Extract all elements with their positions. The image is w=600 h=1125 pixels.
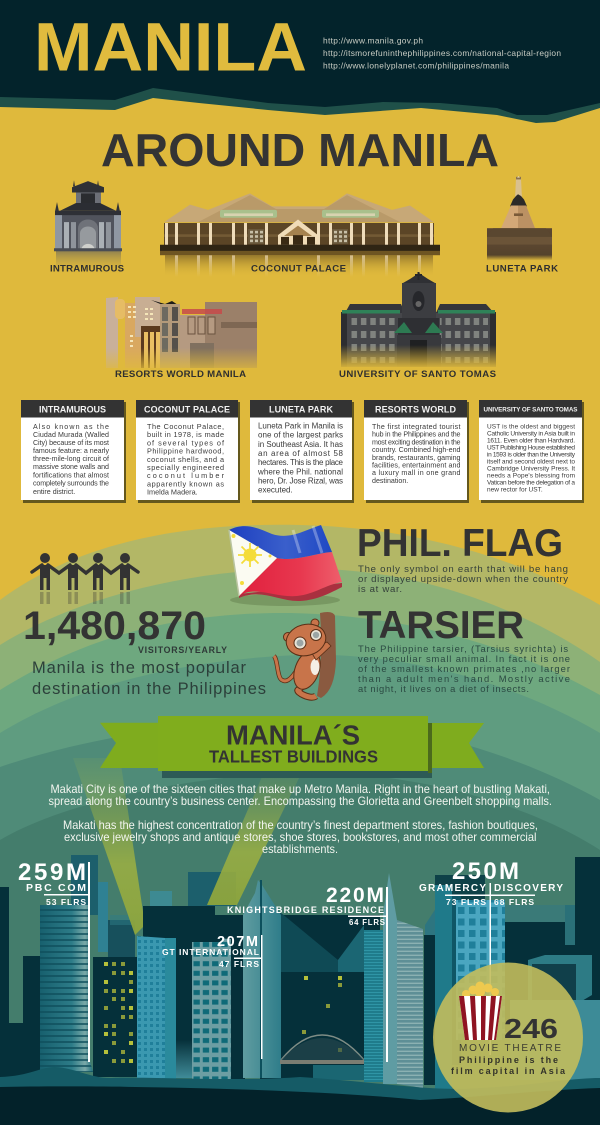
skyline backdrop and buildings: [0, 758, 600, 1125]
callout: movie theatre circle: [433, 962, 583, 1112]
card text: executed.: [258, 486, 293, 494]
tower: Gramercy and Discovery: [435, 885, 505, 1090]
landmark: resorts world manila: [106, 297, 257, 374]
tower: striped twin: [364, 873, 423, 1088]
card text: in Southeast Asia. It has: [258, 440, 343, 449]
destination statement: Manila is the most popular: [32, 659, 246, 677]
card: coconut palace: [136, 400, 240, 503]
destination statement: destination in the Philippines: [32, 680, 266, 698]
banner subheading: TALLEST BUILDINGS: [209, 746, 378, 766]
destination statement: [32, 659, 266, 698]
card text: 1611. Even older than Hardvard.: [487, 438, 575, 444]
card text: a luxury mall in one grand: [372, 469, 461, 477]
stat: Gramercy and Discovery 250M: 250M: [452, 858, 519, 885]
card text: Catholic University in Asia built in: [487, 430, 575, 438]
background towers: [71, 855, 575, 965]
card text: The Coconut Palace,: [147, 422, 224, 431]
card text: Vatican before the delegation of a: [487, 480, 575, 486]
source links: http://itsmorefuninthephilippines.com/national-capital-region: [323, 48, 561, 58]
intro text: establishments.: [262, 842, 338, 856]
heading: phil flag: PHIL. FLAG: [357, 522, 563, 565]
card: coconut palace: COCONUT PALACE: [144, 404, 230, 414]
card text: The first integrated tourist: [372, 423, 461, 431]
cinema note: film capital in Asia: [451, 1066, 566, 1076]
card text: [147, 422, 225, 497]
card: resorts world: [364, 400, 469, 503]
card text: built in 1978, is made: [147, 430, 224, 439]
flag description: or displayed upside-down when the country: [358, 574, 568, 585]
card text: entire district.: [33, 488, 75, 496]
card header: [479, 400, 582, 418]
card text: Luneta Park in Manila is: [258, 422, 343, 430]
card text: hub in the Philippines and the: [372, 431, 461, 439]
card text: [33, 423, 109, 496]
tarsier description: than a adult men's hand. Mostly active: [358, 673, 570, 684]
card text: itself and second oldest next to: [487, 458, 575, 466]
card header: [250, 400, 352, 418]
heading: tarsier: TARSIER: [358, 604, 524, 647]
card text: hero, Dr. Jose Rizal, was: [258, 476, 343, 485]
card text: an area of almost 58: [258, 449, 344, 458]
tower: PBC Com: [40, 905, 93, 1072]
card: university of santo tomas: UNIVERSITY OF SANTO TOMAS: [484, 406, 578, 414]
card text: [372, 423, 461, 485]
stat: PBC Com 259M: 53 FLRS: [46, 897, 86, 907]
stat: GT International 207M: GT INTERNATIONAL: [162, 947, 259, 957]
ground: [0, 1067, 600, 1125]
heading: around manila: AROUND MANILA: [101, 124, 499, 176]
intro text: [48, 782, 552, 856]
dark silhouettes: [0, 857, 600, 1085]
intro text: Makati City is one of the sixteen cities that make up Metro Manila. Right in the heart of bustling Makati,: [50, 782, 550, 796]
flag sun: [238, 543, 262, 567]
stat: Gramercy and Discovery 250M: [419, 858, 563, 1055]
flag description: [358, 564, 568, 595]
card text: facilities, entertainment and: [372, 462, 461, 470]
card text: destination.: [372, 477, 408, 485]
cinema note: [451, 1055, 566, 1076]
card: intramurous: [21, 400, 126, 503]
card text: brands, restaurants, gaming: [372, 454, 461, 462]
card text: new rector for UST.: [487, 486, 543, 494]
card text: needs a Pope's blessing from: [487, 472, 575, 480]
lit windows: [104, 962, 342, 1063]
intro text: exclusive jewelry shops and antique stores, shoe stores, bookstores, and most other commercial: [64, 830, 536, 844]
landmark: coconut palace: [160, 193, 440, 277]
stat: Gramercy and Discovery 250M: 68 FLRS: [494, 897, 534, 907]
card text: Also known as the: [33, 423, 109, 431]
card text: Imelda Madera.: [147, 488, 198, 497]
cinema note: Philippine is the: [459, 1055, 558, 1065]
tower: light grid building: [137, 936, 192, 1079]
stat: PBC Com 259M: PBC COM: [26, 882, 86, 894]
searchlight beams: [73, 758, 302, 935]
card text: of several types of: [147, 438, 225, 447]
card text: coconut shells, and a: [147, 455, 225, 464]
card text: [487, 424, 576, 494]
intro text: Makati has the highest concentration of the country’s finest department stores, fashion boutiques,: [63, 818, 538, 832]
visitors caption: VISITORS/YEARLY: [138, 645, 227, 655]
tower: GT International: [192, 936, 231, 1080]
source links: http://www.lonelyplanet.com/philippines/manila: [323, 60, 509, 70]
stat: Gramercy and Discovery 250M: DISCOVERY: [494, 883, 563, 894]
card text: UST Publishing House established: [487, 444, 575, 452]
card text: one of the largest parks: [258, 431, 343, 440]
tower: Knightsbridge: [243, 880, 281, 1078]
stat: GT International 207M: 207M: [217, 934, 258, 950]
arch bridge: [280, 1035, 364, 1080]
label: coconut palace: COCONUT PALACE: [251, 264, 347, 274]
icon: tarsier on tree: [274, 612, 336, 698]
background curved colour bands: [0, 525, 600, 1125]
tarsier description: at night, it lives on a diet of insects.: [358, 683, 529, 694]
flag description: is at war.: [358, 584, 402, 595]
main title: MANILA: [34, 9, 307, 86]
source links: http://www.manila.gov.ph: [323, 36, 423, 46]
banner heading: MANILA´S: [226, 719, 360, 750]
header band: [0, 0, 600, 123]
card text: hectares. This is the place: [258, 458, 344, 467]
landmark: luneta park: [487, 176, 552, 260]
landmark: university of santo tomas: [341, 272, 496, 369]
card text: where the Phil. national: [257, 467, 343, 476]
stat: Knightsbridge Residence 220M: [227, 884, 388, 1062]
stat: PBC Com 259M: [18, 859, 90, 1062]
stat: Knightsbridge Residence 220M: KNIGHTSBRIDGE RESIDENCE: [227, 905, 384, 915]
card text: massive stone walls and: [33, 463, 109, 471]
card text: [257, 422, 344, 494]
intro text: spread along the country’s business center. Encompassing the Glorietta and Greenbelt shopping malls.: [48, 794, 552, 808]
card text: Ciudad Murada (Walled: [33, 431, 109, 439]
card text: famous feature: a nearly: [33, 447, 109, 455]
card text: specially engineered: [147, 463, 224, 472]
icon: people holding hands: [32, 553, 138, 604]
card: luneta park: LUNETA PARK: [269, 404, 334, 414]
card text: fortifications that almost: [33, 472, 109, 480]
icon: philippine flag: [229, 525, 342, 606]
tarsier description: [358, 643, 570, 694]
card text: Cambridge University Press. It: [487, 466, 575, 472]
stat: Knightsbridge Residence 220M: 64 FLRS: [349, 918, 385, 927]
tarsier description: of the smallest known primates ,no larger: [358, 663, 570, 674]
cinema label: MOVIE THEATRE: [459, 1043, 561, 1054]
card text: three-mile-long circuit of: [33, 455, 109, 463]
visitors figure: 1,480,870: [23, 604, 206, 648]
card: university of santo tomas: [479, 400, 584, 503]
card header: [136, 400, 238, 418]
card text: City) because of its most: [33, 439, 109, 447]
building behind circle: [510, 955, 600, 1080]
stat: Knightsbridge Residence 220M: 220M: [326, 884, 384, 907]
card text: completely surrounds the: [33, 480, 109, 488]
card: luneta park: [250, 400, 354, 503]
stat: GT International 207M: [162, 934, 262, 1059]
stat: Gramercy and Discovery 250M: 73 FLRS: [446, 897, 486, 907]
cinema count: 246: [504, 1013, 558, 1044]
tarsier description: The Philippine tarsier, (Tarsius syrichta) is: [358, 643, 568, 654]
card header: [21, 400, 124, 418]
stat: GT International 207M: 47 FLRS: [219, 959, 259, 969]
label: luneta park: LUNETA PARK: [486, 264, 558, 274]
label: university of santo tomas: UNIVERSITY OF SANTO TOMAS: [339, 369, 497, 380]
icon: popcorn: [459, 982, 502, 1040]
card text: country. Combined high-end: [372, 446, 461, 454]
card text: apparently known as: [147, 479, 224, 488]
landmark: intramuros: [54, 180, 122, 275]
card text: coconut lumber: [147, 471, 225, 480]
card text: most exciting destination in the: [372, 438, 461, 446]
flag description: The only symbol on earth that will be hang: [358, 564, 568, 575]
source links: [323, 36, 561, 70]
card: intramurous: INTRAMUROUS: [39, 404, 106, 414]
stat: PBC Com 259M: 259M: [18, 859, 86, 886]
card text: UST is the oldest and biggest: [487, 424, 575, 430]
card header: [364, 400, 467, 418]
label: resorts world manila: RESORTS WORLD MANILA: [115, 369, 246, 380]
label: intramurous: INTRAMUROUS: [50, 264, 125, 274]
tarsier description: very peculiar small animal. In fact it is one: [358, 653, 570, 664]
card text: in 1593 is older than the University: [487, 452, 576, 458]
stat: Gramercy and Discovery 250M: GRAMERCY: [419, 883, 486, 894]
card text: Philippine hardwood,: [147, 447, 224, 456]
banner: tallest buildings: [100, 716, 484, 778]
card: resorts world: RESORTS WORLD: [375, 404, 456, 414]
